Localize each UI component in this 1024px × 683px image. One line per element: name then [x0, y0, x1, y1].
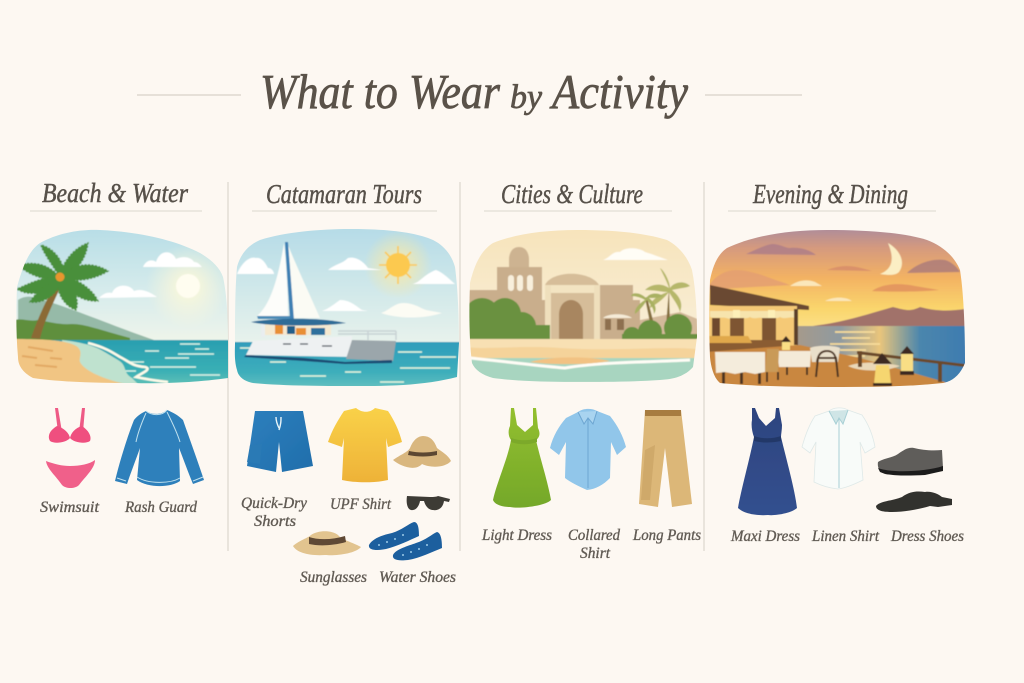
scene: seaside dining at sunset	[709, 230, 965, 387]
item: long pants	[639, 410, 692, 507]
item: linen shirt	[802, 408, 875, 489]
item: collar detail	[578, 411, 597, 488]
label: Swimsuit: Swimsuit	[40, 499, 100, 516]
scene: colonial city	[469, 230, 697, 382]
label: Linen Shirt: Linen Shirt	[811, 528, 880, 545]
scene: catamaran	[234, 229, 459, 386]
item: sun hat	[393, 436, 451, 468]
label: Maxi Dress: Maxi Dress	[730, 528, 800, 545]
label: Quick-Dry Shorts: Quick-Dry	[241, 495, 307, 512]
label: Quick-Dry Shorts	[241, 495, 307, 530]
item: light dress	[493, 408, 551, 508]
item: maxi dress	[738, 408, 797, 515]
label: Water Shoes: Water Shoes	[379, 569, 456, 586]
title	[260, 64, 688, 119]
label: Light Dress: Light Dress	[481, 527, 552, 544]
label: Long Pants: Long Pants	[632, 527, 701, 544]
label: Collared Shirt: Collared	[568, 527, 620, 544]
item: linen shirt collar	[829, 410, 848, 488]
title: What to Wear	[260, 64, 501, 119]
heading: Evening & Dining: Evening & Dining	[752, 179, 908, 209]
item: collared shirt	[550, 409, 626, 490]
heading: Cities & Culture: Cities & Culture	[501, 179, 643, 209]
title: by	[510, 79, 543, 116]
label: Sunglasses: Sunglasses	[300, 569, 367, 586]
label: Collared Shirt	[568, 527, 620, 562]
heading: Beach & Water: Beach & Water	[42, 178, 188, 208]
title: Activity	[549, 64, 688, 119]
label: Dress Shoes: Dress Shoes	[890, 528, 964, 545]
scene: tropical beach	[16, 230, 228, 384]
item: quick-dry shorts	[247, 411, 313, 472]
label: UPF Shirt: UPF Shirt	[330, 496, 392, 513]
label: Quick-Dry Shorts: Shorts	[254, 513, 296, 530]
infographic canvas	[16, 74, 965, 586]
item: dress shoes	[876, 448, 952, 512]
item: swimsuit	[46, 408, 95, 488]
item: wide-brim hat	[293, 531, 361, 555]
label: Collared Shirt: Shirt	[580, 545, 611, 562]
item: rash guard	[115, 410, 204, 486]
label: Rash Guard: Rash Guard	[124, 499, 197, 516]
heading: Catamaran Tours: Catamaran Tours	[266, 179, 422, 209]
item: sunglasses	[407, 496, 450, 510]
item: water shoes	[369, 522, 442, 560]
item: UPF shirt	[328, 408, 402, 482]
